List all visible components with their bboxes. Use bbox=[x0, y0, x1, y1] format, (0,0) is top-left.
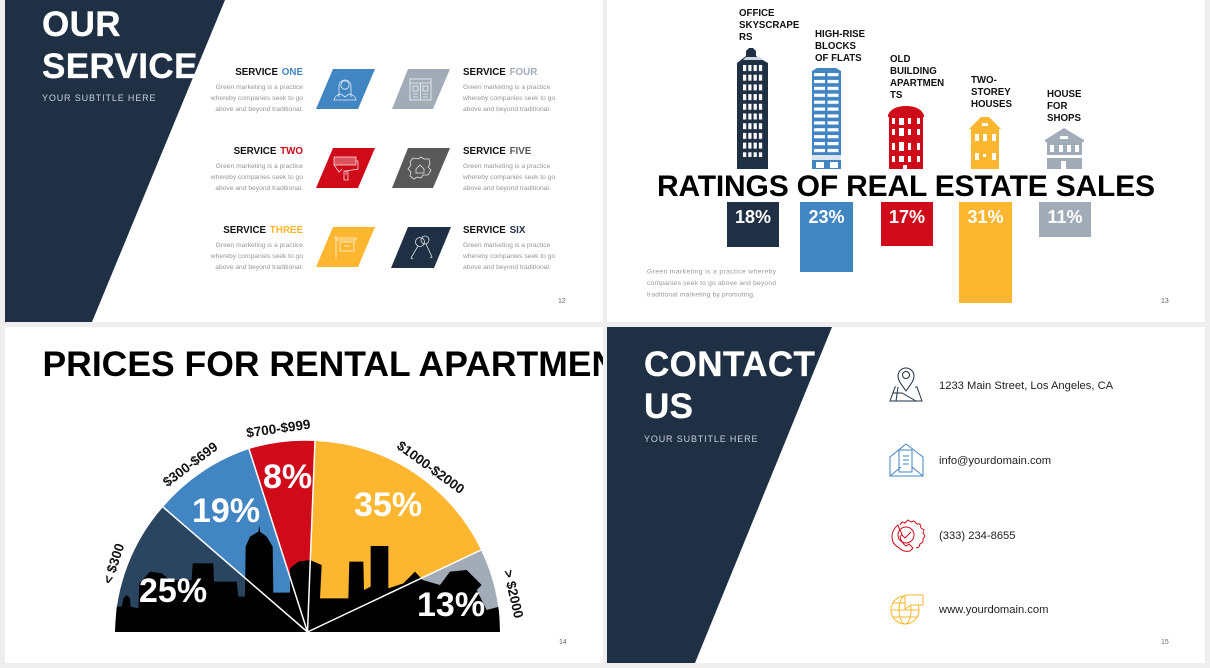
curved range labels: < $300 bbox=[100, 541, 127, 586]
page number 13: 13 bbox=[1161, 298, 1169, 305]
building: office skyscrapers: OFFICE bbox=[739, 8, 775, 19]
service four: whereby companies seek to go bbox=[462, 95, 555, 102]
percentages: 13% bbox=[417, 586, 485, 624]
service three: whereby companies seek to go bbox=[210, 253, 303, 260]
building: old building apartments: BUILDING bbox=[890, 66, 937, 77]
service two: Green marketing is a practice bbox=[216, 163, 303, 170]
contact: email: info@yourdomain.com bbox=[939, 455, 1051, 467]
heading line two: SERVICE bbox=[42, 47, 198, 86]
percentages: 19% bbox=[192, 492, 260, 530]
building: high-rise blocks of flats: BLOCKS bbox=[815, 41, 856, 52]
percentages: 25% bbox=[139, 572, 207, 610]
heading: us: US bbox=[644, 387, 693, 426]
panel: our service bbox=[5, 0, 603, 322]
text block: description: traditional marketing by promoting. bbox=[647, 292, 755, 298]
panel: contact us bbox=[607, 327, 1205, 663]
building: high-rise blocks of flats: OF FLATS bbox=[815, 53, 862, 64]
service one bbox=[210, 67, 375, 113]
service four: SERVICE FOUR bbox=[463, 67, 537, 78]
subtitle: YOUR SUBTITLE HERE bbox=[42, 93, 156, 103]
bar chart: ratings: 17% bbox=[889, 207, 925, 227]
contact: email bbox=[890, 444, 1051, 476]
service two bbox=[210, 146, 375, 192]
bar chart: ratings: 23% bbox=[808, 207, 845, 227]
heading: ratings of real estate sales: RATINGS OF REAL ESTATE SALES bbox=[657, 170, 1155, 203]
heading: our service: OUR bbox=[42, 5, 121, 44]
text block: description: companies seek to go above and beyond bbox=[647, 280, 776, 287]
building: office skyscrapers bbox=[737, 8, 800, 169]
bar chart: ratings bbox=[727, 202, 1091, 303]
curved range labels bbox=[100, 417, 526, 620]
contact: website bbox=[891, 595, 1048, 624]
service one: above and beyond traditional. bbox=[215, 106, 303, 113]
contact: phone: (333) 234-8655 bbox=[939, 530, 1016, 542]
building: two-storey houses bbox=[969, 75, 1012, 169]
service four: above and beyond traditional. bbox=[463, 106, 551, 113]
building: two-storey houses: STOREY bbox=[971, 87, 1011, 98]
building: house for shops: HOUSE bbox=[1047, 89, 1082, 100]
service six: Green marketing is a practice bbox=[463, 242, 551, 249]
service two: above and beyond traditional. bbox=[215, 185, 303, 192]
page number 15: 15 bbox=[1161, 639, 1169, 646]
building: old building apartments: TS bbox=[890, 90, 903, 101]
page number 12: 12 bbox=[558, 298, 566, 305]
service six: SERVICE SIX bbox=[463, 225, 526, 236]
bar chart: ratings: 18% bbox=[735, 207, 771, 227]
service one: SERVICE ONE bbox=[235, 67, 303, 78]
service two: whereby companies seek to go bbox=[210, 174, 303, 181]
service five: Green marketing is a practice bbox=[463, 163, 551, 170]
curved range labels: > $2000 bbox=[501, 568, 526, 620]
service six: whereby companies seek to go bbox=[462, 253, 555, 260]
contact: phone bbox=[892, 520, 1016, 551]
service three: SERVICE THREE bbox=[223, 225, 303, 236]
building: house for shops: FOR bbox=[1047, 101, 1067, 112]
service five: SERVICE FIVE bbox=[463, 146, 532, 157]
percentages: 8% bbox=[263, 458, 312, 496]
contact: address: 1233 Main Street, Los Angeles, CA bbox=[939, 380, 1114, 392]
text block: description: Green marketing is a practice whereby bbox=[647, 268, 777, 276]
panel: prices for rental apartments bbox=[5, 327, 662, 663]
building: office skyscrapers: SKYSCRAPE bbox=[739, 20, 800, 31]
contact: website: www.yourdomain.com bbox=[938, 604, 1048, 616]
service three: Green marketing is a practice bbox=[216, 242, 303, 249]
building: two-storey houses: HOUSES bbox=[971, 99, 1012, 110]
service four: Green marketing is a practice bbox=[463, 84, 551, 91]
service five: above and beyond traditional. bbox=[463, 185, 551, 192]
building: old building apartments: APARTMEN bbox=[890, 78, 944, 89]
percentages bbox=[139, 458, 485, 624]
service five bbox=[392, 146, 555, 192]
service six bbox=[391, 225, 555, 271]
percentages: 35% bbox=[354, 486, 422, 524]
building: house for shops: SHOPS bbox=[1047, 113, 1081, 124]
heading: prices for rental apartments: PRICES FOR RENTAL APARTMENTS bbox=[42, 344, 662, 384]
service four bbox=[392, 67, 555, 113]
service one: whereby companies seek to go bbox=[210, 95, 303, 102]
building: high-rise blocks of flats: HIGH-RISE bbox=[815, 29, 866, 40]
service six: above and beyond traditional. bbox=[463, 264, 551, 271]
dark diagonal banner bbox=[5, 0, 225, 322]
building: house for shops bbox=[1045, 89, 1084, 169]
segment separators bbox=[163, 441, 481, 632]
city skyline silhouette bbox=[115, 525, 500, 633]
service one: Green marketing is a practice bbox=[216, 84, 303, 91]
building: two-storey houses: TWO- bbox=[971, 75, 997, 86]
service five: whereby companies seek to go bbox=[462, 174, 555, 181]
service two: SERVICE TWO bbox=[234, 146, 303, 157]
bar chart: ratings: 31% bbox=[967, 207, 1004, 227]
service three: above and beyond traditional. bbox=[215, 264, 303, 271]
dark diagonal banner bbox=[607, 327, 832, 663]
contact: address bbox=[890, 368, 1114, 401]
curved range labels: $700-$999 bbox=[245, 417, 311, 440]
panel: ratings of real estate sales bbox=[607, 0, 1205, 322]
building: old building apartments bbox=[888, 54, 944, 169]
building: old building apartments: OLD bbox=[890, 54, 910, 65]
bar chart: ratings: 11% bbox=[1047, 207, 1083, 227]
heading: contact: CONTACT bbox=[644, 345, 815, 384]
service three bbox=[210, 225, 375, 271]
curved range labels: $300-$699 bbox=[160, 439, 221, 490]
curved range labels: $1000-$2000 bbox=[394, 438, 467, 497]
semicircle chart bbox=[100, 417, 526, 633]
building: high-rise blocks of flats bbox=[812, 29, 866, 169]
page number 14: 14 bbox=[559, 639, 567, 646]
building: office skyscrapers: RS bbox=[739, 32, 753, 43]
subtitle: YOUR SUBTITLE HERE bbox=[644, 434, 758, 444]
